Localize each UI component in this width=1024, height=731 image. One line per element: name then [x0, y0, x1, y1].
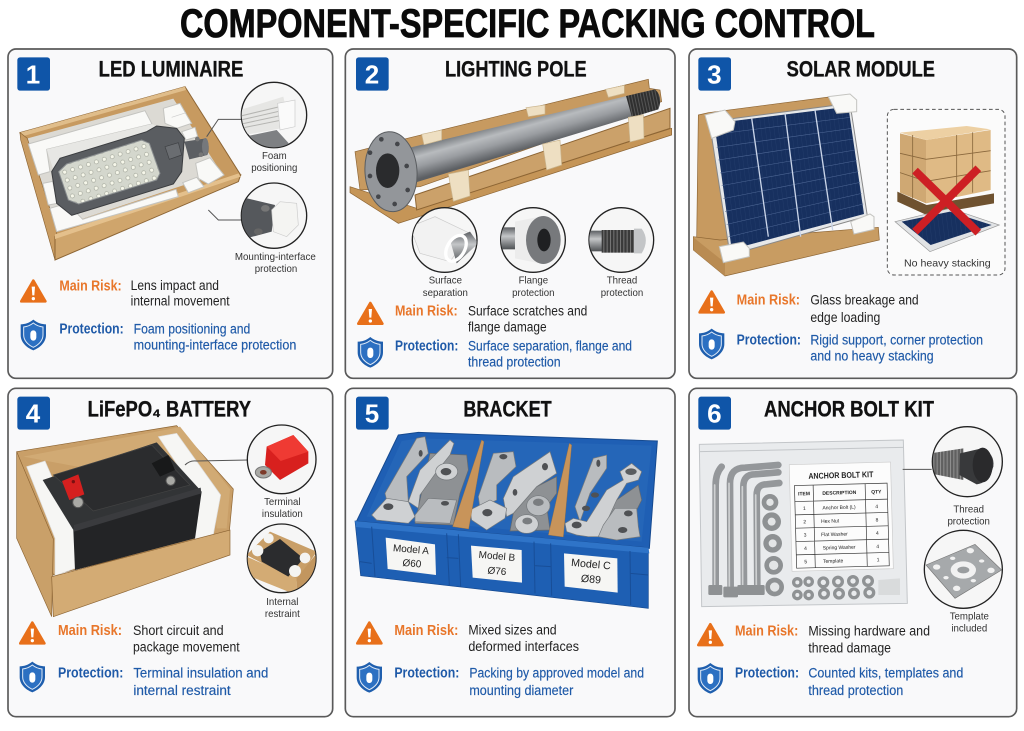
badge 3 [698, 57, 731, 91]
main risk text: Missing hardware and [808, 624, 930, 639]
icon: warning [20, 623, 44, 643]
protection text: Foam positioning and [134, 321, 250, 336]
illustration: luminaire in carton [20, 87, 241, 260]
main risk text: Main Risk: [735, 624, 798, 640]
protection text: Protection: [59, 321, 124, 337]
heading: anchor bolt kit: ANCHOR BOLT KIT [764, 397, 934, 422]
caption: flange protection [512, 275, 555, 299]
icon: warning [357, 623, 381, 643]
badge 2 [356, 57, 389, 91]
caption: internal restraint: restraint [265, 609, 300, 620]
caption: thread protection: Thread [607, 275, 637, 286]
protection text: Surface separation, flange and [468, 339, 632, 354]
caption: template included: included [951, 623, 987, 634]
main risk text: Short circuit and [133, 623, 224, 638]
icon: shield [698, 663, 723, 694]
main risk text [58, 623, 240, 655]
callout: thread protection [903, 427, 1002, 497]
illustration: battery in carton [17, 426, 233, 617]
main risk text: internal movement [131, 293, 230, 308]
bin label: model B [471, 546, 522, 583]
protection text: thread protection [468, 355, 561, 370]
heading: LED luminaire: LED LUMINAIRE [99, 57, 243, 82]
caption: thread protection: protection [947, 517, 990, 528]
protection text: Terminal insulation and [133, 666, 268, 681]
callout: surface separation [410, 208, 478, 272]
badge 3: 3 [707, 59, 722, 89]
protection text [735, 666, 963, 698]
heading: bracket: BRACKET [463, 397, 552, 422]
panel 2: lighting pole [345, 49, 675, 378]
bin label: model C [564, 553, 618, 593]
main risk text: Main Risk: [59, 279, 122, 295]
panel 6: anchor bolt kit [689, 388, 1017, 717]
illustration: blue bin of brackets [355, 432, 657, 608]
protection text [58, 666, 268, 698]
kit list card: 4 [875, 504, 878, 510]
main risk text: Surface scratches and [468, 303, 587, 318]
illustration: solar module on rigid support [693, 94, 879, 276]
main risk text: flange damage [468, 319, 547, 334]
badge 6: 6 [707, 399, 722, 429]
caption: flange protection: Flange [519, 275, 548, 286]
protection text: mounting-interface protection [134, 337, 296, 352]
caption: foam positioning: Foam [262, 151, 287, 162]
kit list card: 1 [803, 506, 806, 512]
icon: warning [358, 303, 382, 324]
protection text: Rigid support, corner protection [810, 333, 983, 348]
badge 4: 4 [26, 399, 41, 429]
caption: surface separation [423, 275, 468, 299]
kit list card: 4 [876, 531, 879, 537]
protection text [737, 333, 983, 364]
bin label: model A: Model A [392, 543, 430, 557]
bin label: model A: Ø60 [402, 558, 422, 571]
kit list card: Anchor Bolt (L) [822, 505, 856, 511]
callout: template included [924, 530, 1002, 608]
caption: no heavy stacking: No heavy stacking [904, 259, 991, 270]
main risk text [394, 622, 579, 654]
icon: shield [21, 320, 46, 350]
kit list card: 8 [876, 517, 879, 523]
caption: template included: Template [950, 611, 989, 622]
kit list card: Hex Nut [821, 518, 840, 525]
panel 5: bracket [345, 388, 675, 717]
icon: warning [21, 281, 45, 301]
badge 5: 5 [365, 399, 379, 429]
protection text: internal restraint [133, 683, 231, 698]
caption: thread protection: Thread [953, 505, 984, 516]
kit list card: Template [823, 558, 844, 565]
badge 1 [17, 57, 50, 91]
caption: thread protection [601, 275, 643, 299]
caption: flange protection: protection [512, 288, 555, 299]
callout: foam positioning [207, 82, 307, 150]
kit list card: QTY [871, 489, 882, 496]
kit list card: 2 [803, 519, 806, 525]
protection text: mounting diameter [469, 683, 574, 698]
icon: shield [358, 337, 383, 368]
protection text [395, 339, 632, 370]
kit list card: Flat Washer [821, 532, 848, 538]
protection text: Protection: [394, 666, 459, 682]
heading: lighting pole: LIGHTING POLE [445, 57, 587, 82]
main risk text [737, 293, 919, 325]
icon: shield [699, 329, 724, 359]
bin label: model B: Model B [478, 550, 516, 564]
protection text [59, 321, 296, 352]
callout: no heavy stacking [887, 109, 1005, 275]
icon: warning [700, 292, 724, 312]
kit list card: 3 [804, 533, 807, 539]
kit list card: ANCHOR BOLT KIT [808, 469, 873, 481]
main risk text: Main Risk: [737, 293, 800, 309]
protection text: thread protection [808, 683, 903, 698]
panel 1: LED luminaire [8, 49, 333, 378]
badge 5 [356, 397, 389, 430]
illustration: sealed bag of hardware [699, 440, 907, 607]
title: COMPONENT-SPECIFIC PACKING CONTROL [180, 2, 875, 46]
badge 2: 2 [365, 59, 379, 89]
caption: mounting-interface protection: Mounting-interface [235, 252, 316, 263]
main risk text [395, 303, 587, 334]
caption: internal restraint [265, 597, 300, 620]
callout: internal restraint [247, 524, 317, 595]
bin label: model B: Ø76 [487, 566, 507, 578]
protection text: Counted kits, templates and [808, 666, 963, 681]
kit list card: 4 [876, 544, 879, 550]
caption: thread protection [947, 505, 990, 528]
bin label: model C: Model C [571, 557, 612, 572]
callout: thread protection [588, 208, 654, 272]
caption: foam positioning: positioning [251, 163, 297, 174]
kit list card: DESCRIPTION [822, 490, 857, 497]
badge 1: 1 [26, 59, 40, 89]
main risk text: Main Risk: [395, 303, 458, 319]
brackets: model C [565, 455, 642, 540]
caption: terminal insulation [262, 497, 303, 520]
caption: thread protection: protection [601, 288, 643, 299]
main risk text: edge loading [810, 310, 880, 325]
icon: warning [698, 624, 722, 645]
caption: foam positioning [251, 151, 297, 174]
heading: solar module: SOLAR MODULE [787, 57, 935, 82]
kit list card [789, 462, 893, 571]
kit list card: 5 [804, 559, 807, 565]
heading: LiFePO4 battery: LiFePO₄ BATTERY [88, 397, 251, 422]
caption: mounting-interface protection [235, 252, 316, 275]
caption: terminal insulation: Terminal [264, 497, 301, 508]
icon: shield [357, 662, 382, 693]
caption: surface separation: Surface [429, 275, 462, 286]
protection text: Protection: [395, 339, 458, 355]
caption: template included [950, 611, 989, 634]
main risk text: package movement [133, 640, 240, 655]
kit list card: ITEM [798, 491, 810, 497]
kit list card: Spring Washer [823, 545, 856, 552]
main risk text: deformed interfaces [468, 639, 579, 654]
callout: mounting-interface protection [208, 183, 307, 248]
bin label: model C: Ø89 [580, 573, 602, 587]
main risk text [735, 624, 930, 655]
brackets: model B [470, 452, 557, 533]
main risk text: Lens impact and [131, 278, 219, 293]
protection text: Packing by approved model and [469, 666, 644, 681]
protection text: Protection: [737, 333, 801, 349]
kit list card: 4 [804, 546, 807, 552]
protection text: Protection: [58, 666, 123, 682]
icon: shield [20, 662, 45, 692]
badge 6 [698, 397, 731, 430]
protection text [394, 666, 644, 698]
protection text: Protection: [735, 666, 799, 682]
callout: flange protection [500, 208, 565, 272]
illustration: pole in wooden cradle [350, 79, 672, 223]
caption: terminal insulation: insulation [262, 509, 303, 520]
bin label: model A [386, 538, 436, 575]
caption: internal restraint: Internal [266, 597, 298, 608]
main risk text: Main Risk: [394, 623, 458, 639]
brackets: model A [372, 437, 468, 525]
panel 4: LiFePO4 battery [8, 388, 333, 717]
main risk text: thread damage [808, 640, 891, 655]
main risk text: Glass breakage and [810, 293, 919, 308]
callout: terminal insulation [185, 425, 316, 494]
L-bolts [715, 465, 779, 592]
panel 3: solar module [689, 49, 1017, 378]
caption: mounting-interface protection: protection [255, 264, 297, 275]
badge 4 [17, 397, 50, 430]
protection text: and no heavy stacking [810, 349, 934, 364]
main risk text [59, 278, 230, 308]
main risk text: Mixed sizes and [468, 622, 557, 637]
kit list card: 1 [877, 557, 880, 563]
main risk text: Main Risk: [58, 623, 122, 639]
caption: surface separation: separation [423, 288, 468, 299]
